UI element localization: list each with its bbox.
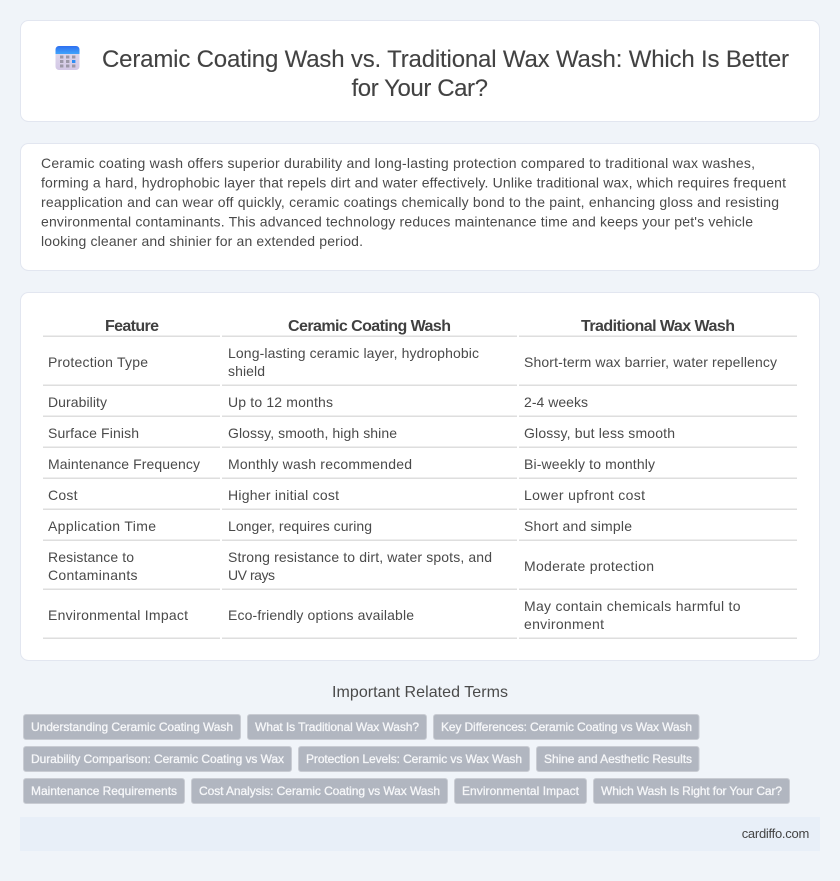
row: durability [48,394,588,410]
row: maintenance frequency: Monthly wash recommended [228,456,412,472]
tag [594,778,790,804]
row: surface finish: Glossy, smooth, high shine [228,425,397,441]
row: resistance to contaminants [48,549,654,583]
row: application time [48,518,632,534]
text block: summary: looking cleaner and shinier for an extended period. [41,233,363,249]
row: application time: Application Time [48,518,156,534]
row: durability: 2-4 weeks [524,394,588,410]
row: protection type: Short-term wax barrier, water repellency [524,354,777,370]
table header row: Ceramic Coating Wash [288,318,451,335]
panel: header [20,20,820,122]
text block: summary [41,155,786,249]
icon: calendar [56,46,80,70]
row: protection type: Long-lasting ceramic layer, hydrophobic [228,345,479,361]
row: environmental impact: Eco-friendly options available [228,607,414,623]
tag [24,746,292,772]
row: cost [48,487,645,503]
text block: summary: Ceramic coating wash offers superior durability and long-lasting protection compared to traditional wax washes, [41,155,755,171]
tag: What Is Traditional Wax Wash? [255,720,419,734]
row: cost: Higher initial cost [228,487,339,503]
tag [298,746,530,772]
tag: Shine and Aesthetic Results [544,752,692,766]
tag: Understanding Ceramic Coating Wash [31,720,233,734]
tag list: related terms [24,714,790,804]
row: resistance to contaminants: Moderate protection [524,558,654,574]
tag [434,714,699,740]
row: protection type: shield [228,363,265,379]
row: resistance to contaminants: Strong resistance to dirt, water spots, and [228,549,492,565]
title: Ceramic Coating Wash vs. Traditional Wax Wash: Which Is Better [102,46,789,73]
row: maintenance frequency: Maintenance Frequency [48,456,200,472]
row: environmental impact [48,598,741,632]
row: resistance to contaminants: UV rays [228,567,275,583]
table header row: Feature [105,318,159,335]
row: resistance to contaminants: Resistance to [48,549,134,565]
tag: Maintenance Requirements [31,784,177,798]
title [102,46,789,102]
row: protection type: Protection Type [48,354,148,370]
heading: related terms: Important Related Terms [332,684,508,701]
row: surface finish: Surface Finish [48,425,139,441]
text block: summary: reapplication and can wear off quickly, ceramic coatings chemically bond to the paint, enhancing gloss and resisting [41,194,779,210]
row: environmental impact: Environmental Impact [48,607,188,623]
title: for Your Car? [352,75,488,102]
text block: summary: forming a hard, hydrophobic layer that repels dirt and water effectively. Unlike traditional wax, which requires frequent [41,174,786,190]
row: application time: Short and simple [524,518,632,534]
tag [454,778,586,804]
tag: Which Wash Is Right for Your Car? [601,784,782,798]
row: surface finish [48,425,675,441]
tag [24,778,184,804]
row: durability: Durability [48,394,107,410]
row: maintenance frequency: Bi-weekly to monthly [524,456,655,472]
tag [536,746,699,772]
tag: Protection Levels: Ceramic vs Wax Wash [306,752,522,766]
tag [248,714,426,740]
row: environmental impact: environment [524,616,604,632]
row: resistance to contaminants: Contaminants [48,567,138,583]
footer [20,817,820,851]
row: durability: Up to 12 months [228,394,333,410]
tag: Durability Comparison: Ceramic Coating vs Wax [31,752,284,766]
tag: Environmental Impact [462,784,580,798]
table header row: Traditional Wax Wash [581,318,735,335]
tag [192,778,448,804]
footer: cardiffo.com [742,826,809,841]
tag [24,714,240,740]
table header row [105,318,735,335]
panel: comparison table [20,292,820,660]
row: environmental impact: May contain chemicals harmful to [524,598,741,614]
row: surface finish: Glossy, but less smooth [524,425,675,441]
row: application time: Longer, requires curing [228,518,372,534]
tag: Key Differences: Ceramic Coating vs Wax Wash [441,720,692,734]
row: cost: Lower upfront cost [524,487,645,503]
row: protection type [48,345,777,379]
row: cost: Cost [48,487,78,503]
row: maintenance frequency [48,456,655,472]
panel: summary paragraph [20,144,820,270]
tag: Cost Analysis: Ceramic Coating vs Wax Wash [199,784,440,798]
text block: summary: environmental contaminants. This advanced technology reduces maintenance time and keeps your pet's vehicle [41,214,753,230]
